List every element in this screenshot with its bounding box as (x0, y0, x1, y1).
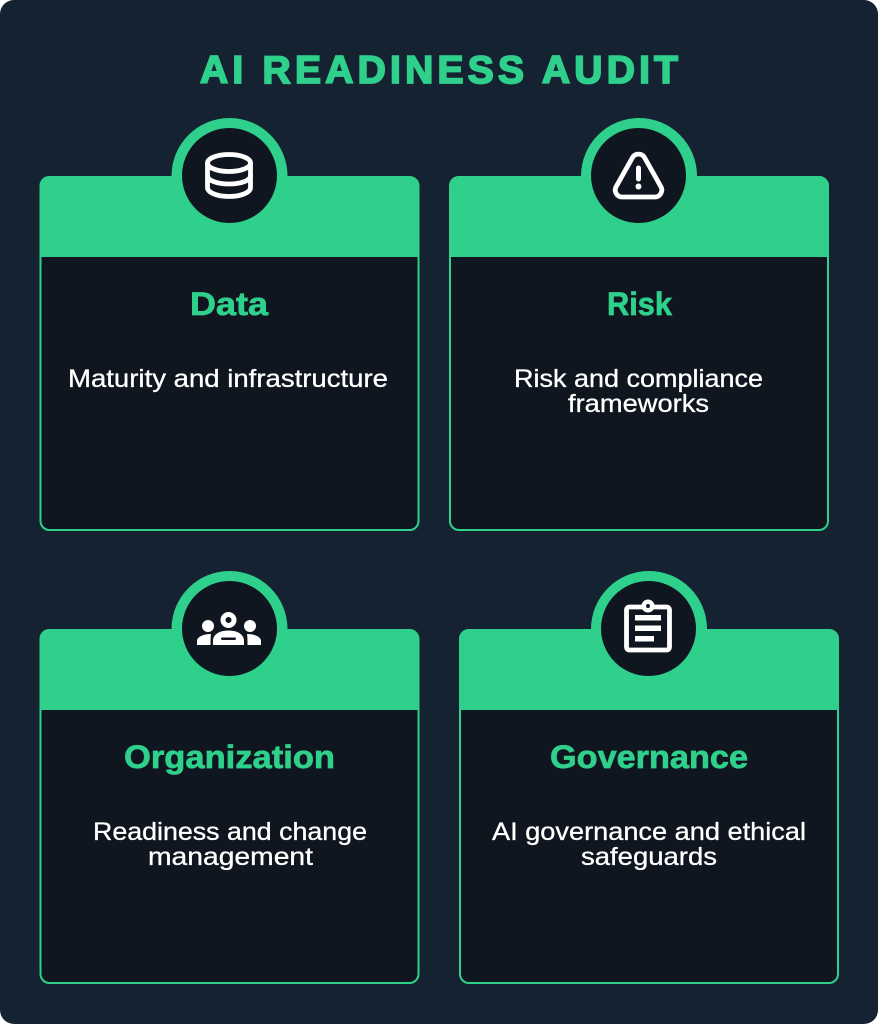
text: organization description (93, 818, 367, 871)
icon: clipboard (626, 600, 670, 650)
text: governance description (492, 818, 806, 871)
text: risk description (514, 365, 763, 418)
text: data description: Maturity and infrastructure (68, 365, 388, 393)
icon: warning triangle (615, 154, 662, 197)
heading: data: Data (190, 286, 268, 322)
text: organization description: Readiness and change (93, 818, 367, 846)
text: governance description: safeguards (581, 843, 717, 871)
panel: data (40, 118, 419, 530)
heading: risk: Risk (607, 286, 672, 322)
title: AI READINESS AUDIT (200, 49, 678, 92)
icon: people (197, 614, 261, 645)
panel: organization (40, 571, 419, 983)
text: risk description: frameworks (568, 390, 709, 418)
icon: database (208, 154, 250, 196)
text: organization description: management (148, 843, 313, 871)
panel: governance (459, 571, 839, 983)
text: risk description: Risk and compliance (514, 365, 763, 393)
panel: risk (449, 118, 829, 530)
text: governance description: AI governance and ethical (492, 818, 806, 846)
heading: governance: Governance (550, 739, 748, 775)
heading: organization: Organization (124, 739, 335, 775)
